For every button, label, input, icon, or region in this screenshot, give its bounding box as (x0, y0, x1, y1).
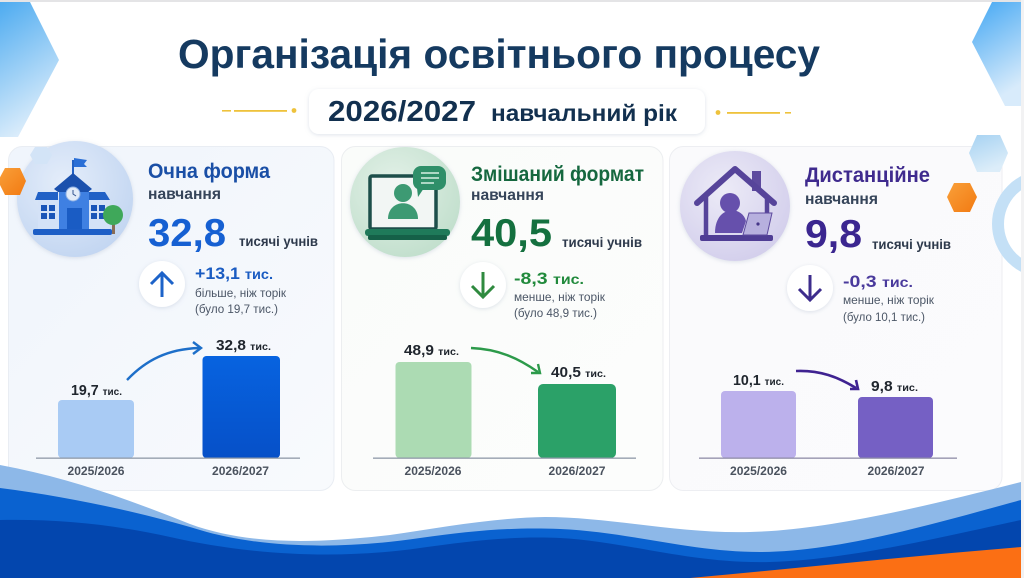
key number: 9,8 (805, 213, 862, 256)
bar chart: blended: 40,5 тис. (551, 364, 606, 381)
panel: in-person education (0, 141, 334, 490)
bar chart: distance: 9,8 тис. (871, 378, 918, 395)
subheading: навчання (471, 187, 544, 204)
bottom wave: bright blue (0, 488, 1021, 578)
change value: -8,3 тис. (514, 270, 584, 288)
bar chart: blended: 48,9 тис. (404, 342, 459, 359)
bar chart: in-person: 32,8 тис. (216, 337, 271, 354)
change note: (було 10,1 тис.) (843, 312, 925, 324)
subtitle pill: навчальний рік (491, 100, 677, 126)
icon: house with learner (680, 151, 790, 261)
bar chart: in-person (36, 337, 300, 478)
bar chart: distance: 10,1 тис. (733, 372, 784, 389)
change value: -0,3 тис. (843, 273, 913, 291)
decorative hexagon top right (972, 2, 1021, 106)
panel: distance education (670, 146, 1002, 490)
change note: менше, ніж торік (843, 295, 935, 307)
decorative orange hexagon (0, 168, 26, 195)
subheading: навчання (805, 191, 878, 208)
bar chart: in-person: 19,7 тис. (71, 382, 122, 399)
subtitle pill: 2026/2027 (328, 96, 476, 128)
bar chart: in-person: 2026/2027 (212, 464, 269, 478)
subtitle ornament right (716, 110, 791, 115)
icon: down arrow (787, 265, 833, 311)
heading: Дистанційне (805, 163, 930, 187)
bar chart: distance (699, 371, 957, 478)
bottom wave: orange (690, 547, 1021, 578)
bar chart: distance: 2026/2027 (868, 464, 925, 478)
heading: Очна форма (148, 159, 271, 183)
title: Організація освітнього процесу (178, 31, 820, 77)
panel: blended education (342, 146, 663, 490)
change note (514, 292, 606, 320)
change note: (було 48,9 тис.) (514, 308, 597, 320)
icon: down arrow (460, 262, 506, 308)
key number: 40,5 (471, 212, 552, 255)
change note (843, 295, 935, 324)
top edge strip (0, 0, 1024, 2)
decorative pale hexagon right (969, 135, 1008, 172)
subheading: навчання (148, 186, 221, 203)
icon: up arrow (139, 261, 185, 307)
bar chart: blended (373, 342, 636, 478)
right edge strip (1021, 0, 1024, 578)
change note: (було 19,7 тис.) (195, 304, 278, 316)
change note: менше, ніж торік (514, 292, 606, 304)
unit: тисячі учнів (562, 235, 642, 250)
change note (195, 288, 287, 316)
decorative hexagon top left (0, 2, 59, 137)
subtitle pill (309, 89, 705, 134)
bottom wave: dark blue (0, 520, 1021, 578)
heading: Змішаний формат (471, 162, 644, 186)
unit: тисячі учнів (872, 237, 951, 252)
bar chart: in-person: 2025/2026 (68, 464, 125, 478)
bar chart: blended: 2026/2027 (548, 464, 606, 478)
key number: 32,8 (148, 212, 226, 255)
decorative pale hexagon (30, 147, 52, 164)
decorative orange hexagon (947, 183, 977, 212)
change note: більше, ніж торік (195, 288, 287, 300)
bottom wave: light blue (0, 465, 1021, 578)
unit: тисячі учнів (239, 234, 318, 249)
change value: +13,1 тис. (195, 265, 273, 283)
bar chart: distance: 2025/2026 (730, 464, 787, 478)
bar chart: blended: 2025/2026 (404, 464, 462, 478)
icon: school (17, 141, 133, 257)
icon: laptop with chat (350, 147, 460, 257)
subtitle ornament left (222, 108, 296, 113)
decorative ring right edge (998, 176, 1024, 272)
